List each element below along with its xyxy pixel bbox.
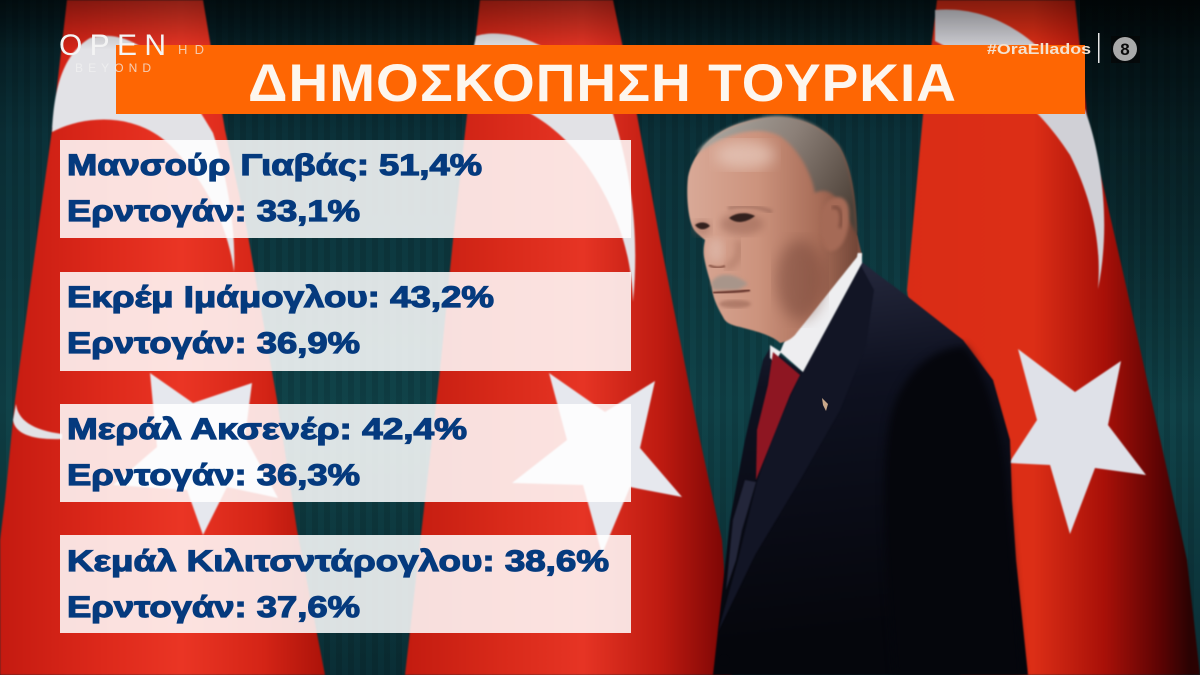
moustache xyxy=(711,275,748,290)
nose shadow xyxy=(725,240,739,268)
head xyxy=(687,118,858,343)
eye socket left xyxy=(693,220,711,236)
poll panel: Aksener vs Erdogan: Ερντογάν: 36,3% xyxy=(67,459,360,492)
jacket button xyxy=(718,654,730,666)
title text: ΔΗΜΟΣΚΟΠΗΣΗ ΤΟΥΡΚΙΑ xyxy=(248,54,957,113)
jacket sleeve xyxy=(885,346,1022,675)
person: man in dark suit xyxy=(687,116,1028,675)
crescent: left flag xyxy=(52,36,234,272)
crescent tail: left flag xyxy=(13,404,62,439)
poll panel: Kilicdaroglu vs Erdogan: Κεμάλ Κιλιτσντάρογλου: 38,6% xyxy=(67,545,609,578)
waistcoat xyxy=(726,480,756,590)
eye: right xyxy=(729,213,755,222)
poll panel: Aksener vs Erdogan xyxy=(60,404,631,502)
star: right flag xyxy=(1009,349,1146,534)
eye: left xyxy=(695,222,710,229)
channel logo: OPEN Beyond HD: HD xyxy=(178,42,204,57)
nostril xyxy=(709,265,725,267)
poll panel: Imamoglu vs Erdogan: Εκρέμ Ιμάμογλου: 43,2% xyxy=(67,281,494,314)
forehead highlight xyxy=(715,141,775,169)
hair xyxy=(696,116,857,235)
poll panel: Imamoglu vs Erdogan xyxy=(60,272,631,371)
poll panel: Giavas vs Erdogan xyxy=(60,140,631,238)
jacket lapel xyxy=(718,264,874,632)
hashtag and channel badge: #OraEllados xyxy=(987,42,1091,58)
flag: centre xyxy=(405,0,732,675)
shirt collar xyxy=(770,253,862,372)
cheek shadow xyxy=(776,240,824,320)
poll panel: Kilicdaroglu vs Erdogan: Ερντογάν: 37,6% xyxy=(67,591,360,624)
poll panel: Aksener vs Erdogan: Μεράλ Ακσενέρ: 42,4% xyxy=(67,413,467,446)
crescent: centre flag xyxy=(474,33,635,302)
flag: left xyxy=(0,0,325,675)
ear xyxy=(820,197,849,251)
necktie xyxy=(756,352,800,480)
eye sockets xyxy=(720,213,764,235)
poll panel: Giavas vs Erdogan: Μανσούρ Γιαβάς: 51,4% xyxy=(67,149,482,182)
flag: right xyxy=(907,0,1200,675)
channel logo: OPEN Beyond HD xyxy=(59,29,204,75)
poll panel: Giavas vs Erdogan: Ερντογάν: 33,1% xyxy=(67,195,360,228)
poll panel: Kilicdaroglu vs Erdogan xyxy=(60,535,631,633)
chin shadow xyxy=(719,300,751,308)
channel logo: OPEN Beyond HD: OPEN xyxy=(59,29,166,62)
star: centre flag xyxy=(512,373,682,554)
channel logo: OPEN Beyond HD: BEYOND xyxy=(75,61,151,75)
star: left flag xyxy=(113,373,278,535)
hashtag and channel badge xyxy=(987,33,1140,63)
suit jacket xyxy=(713,262,1028,675)
ear inner shadow xyxy=(832,207,841,228)
hashtag and channel badge: 8 xyxy=(1120,40,1130,59)
neck xyxy=(778,235,862,350)
lapel pin xyxy=(822,398,828,411)
poll panel: Imamoglu vs Erdogan: Ερντογάν: 36,9% xyxy=(67,327,360,360)
mouth xyxy=(713,290,750,293)
brow xyxy=(728,207,772,212)
title banner xyxy=(116,45,1085,114)
crescent: right flag xyxy=(935,10,1104,289)
nose highlight xyxy=(708,238,724,262)
